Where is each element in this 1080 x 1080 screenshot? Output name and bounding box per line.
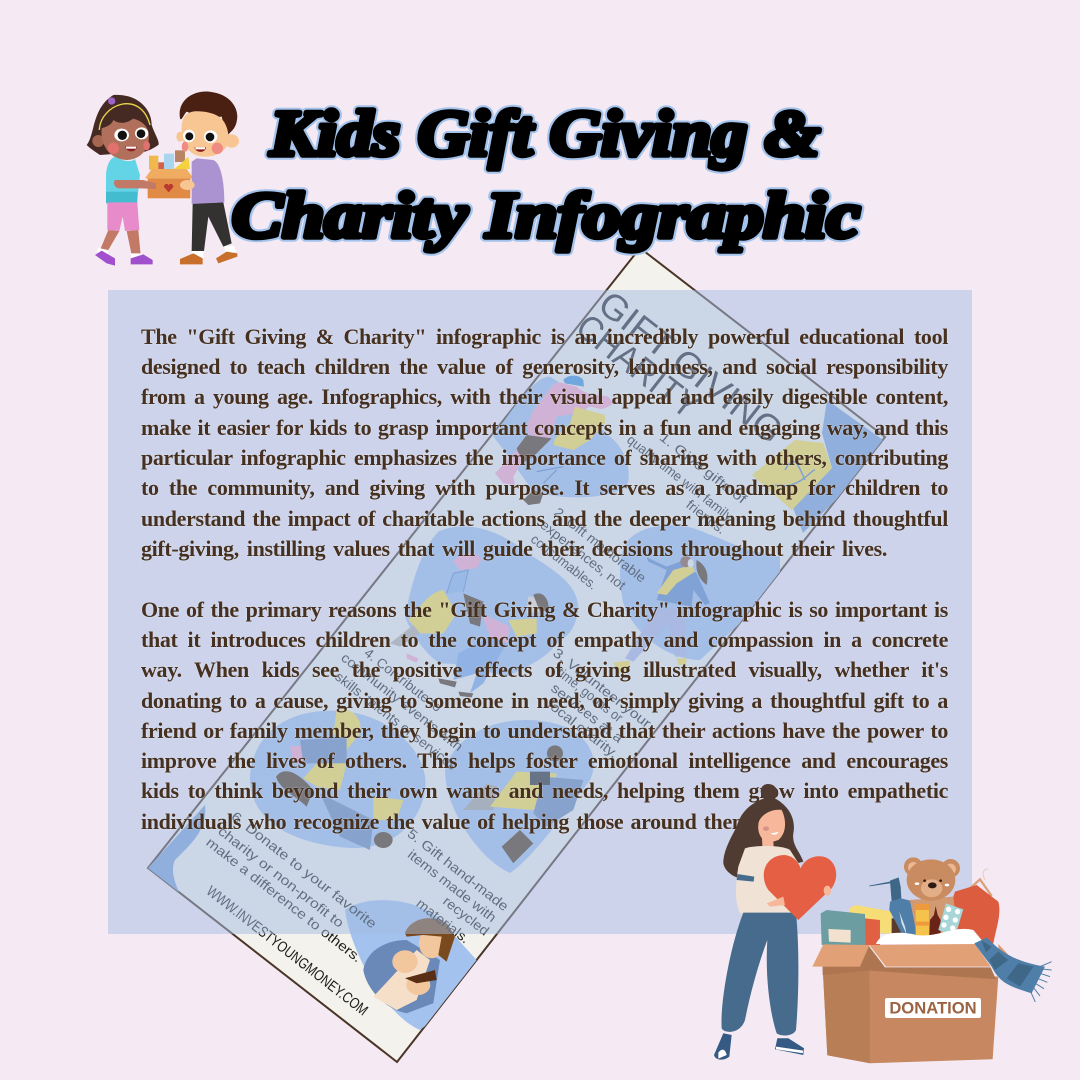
poster tip 6 — [203, 809, 380, 965]
title: Charity Infographic — [232, 180, 860, 252]
pump bottle — [869, 877, 917, 937]
text block: first paragraph — [141, 324, 948, 561]
icon: donation box with toys and supplies — [812, 857, 1052, 1063]
figure: child in yellow scarf — [613, 525, 780, 673]
figure: volunteers sitting together — [276, 709, 403, 850]
text: designed to teach children the value of generosity, kindness, and social responsibility — [141, 354, 948, 379]
poster tip 2 — [528, 505, 649, 593]
poster tip 4: community events with — [338, 650, 466, 754]
red book — [865, 918, 880, 945]
text: to the community, and giving with purpose. It serves as a roadmap for children to — [141, 475, 948, 500]
poster tip 4: 4. Contribute to — [361, 645, 445, 715]
figure: friends sharing a gift — [493, 376, 629, 505]
poster: gift giving and charity, rotated behind the panel — [146, 252, 886, 1064]
orange tube — [916, 904, 929, 937]
poster heading: charity: CHARITY — [569, 306, 707, 426]
text: make it easier for kids to grasp important concepts in a fun and engaging way, and this — [141, 415, 948, 440]
poster tip 2: consumables. — [528, 531, 600, 593]
boy — [176, 91, 239, 264]
text block: second paragraph — [141, 597, 948, 834]
small brown box — [892, 918, 903, 933]
text: particular infographic emphasizes the importance of sharing with others, contributing — [141, 445, 948, 470]
title: Kids Gift Giving & — [269, 98, 820, 170]
text: individuals who recognize the value of helping those around them. — [141, 809, 755, 834]
jacket on hanger — [950, 869, 999, 943]
white stuffing — [876, 929, 985, 944]
poster tip 3 — [545, 645, 654, 761]
blob: left corner accent — [148, 805, 205, 898]
poster tip 5: materials. — [414, 896, 472, 946]
figure: gift experiences group — [390, 526, 578, 697]
poster tip 2: 2. Gift memorable — [551, 505, 649, 585]
poster tip 5: 5. Gift hand-made — [405, 826, 511, 914]
poster tip 1: 1. Give gifts of — [657, 429, 750, 507]
text: kids to think beyond their own wants and needs, helping them grow into empathetic — [141, 778, 948, 803]
poster heading: gift giving: GIFT GIVING — [591, 283, 791, 451]
poster tip 6: charity or non-profit to — [215, 823, 347, 931]
cardboard box — [812, 944, 1012, 1063]
girl — [87, 95, 159, 266]
text: improve the lives of others. This helps foster emotional intelligence and encourages — [141, 748, 948, 773]
figure: person holding chocolates — [363, 918, 455, 1013]
title — [232, 98, 860, 252]
text: donating to a cause, giving to someone in need, or simply giving a thoughtful gift to a — [141, 688, 948, 713]
poster tip 3: 3. Volunteer your — [550, 645, 654, 731]
striped scarf — [974, 938, 1052, 1002]
icon: two kids carrying a gift box — [87, 91, 239, 266]
poster tip 5 — [405, 826, 511, 946]
poster tip 1: quality time with family — [624, 432, 736, 524]
text: understand the impact of charitable actions and the deeper meaning behind thoughtful — [141, 506, 948, 531]
text: way. When kids see the positive effects of giving illustrated visually, whether it's — [141, 657, 948, 682]
poster tip 6: 6. Donate to your favorite — [228, 809, 380, 931]
text: friend or family member, they begin to understand that their actions have the power to — [141, 718, 948, 743]
poster tip 3: time, goods or — [554, 665, 626, 726]
poster tip 2: experiences, not — [537, 517, 629, 593]
yellow book — [849, 905, 892, 933]
icon: yellow gift tag — [752, 440, 832, 510]
text: that it introduces children to the concept of empathy and compassion in a concrete — [141, 627, 948, 652]
gift box — [114, 150, 193, 198]
blob: fourth figure background — [250, 711, 426, 848]
medicine dropper — [929, 906, 941, 935]
poster footer url: WWW.INVESTYOUNGMONEY.COM — [203, 883, 371, 1019]
poster tip 3: local charity. — [545, 697, 621, 761]
figure: group with hand-made gifts — [463, 745, 583, 863]
poster tip 1: friends. — [683, 497, 729, 537]
text: One of the primary reasons the "Gift Giving & Charity" infographic is so important is — [141, 597, 948, 622]
poster tip 4: skills, talents or services — [332, 669, 460, 773]
blob: fifth figure background — [445, 720, 594, 873]
text: from a young age. Infographics, with their visual appeal and easily digestible content, — [141, 384, 948, 409]
teddy bear — [904, 857, 960, 937]
cardboard box: DONATION — [889, 999, 977, 1018]
pill blister pack — [938, 903, 963, 937]
teal book — [821, 910, 866, 945]
panel: translucent blue text background — [108, 290, 972, 934]
title: Kids Gift Giving & — [269, 98, 820, 170]
text: gift-giving, instilling values that will guide their decisions throughout their lives. — [141, 536, 887, 561]
poster tip 3: services at a — [548, 680, 626, 746]
text: The "Gift Giving & Charity" infographic is an incredibly powerful educational tool — [141, 324, 948, 349]
title: Charity Infographic — [232, 180, 860, 252]
poster tip 5: recycled — [440, 893, 492, 939]
blob: right corner accent — [793, 400, 890, 533]
blob: bottom figure background — [345, 900, 490, 1030]
poster tip 6: make a difference to others. — [203, 835, 365, 965]
poster tip 5: items made with — [405, 847, 499, 925]
icon: woman holding a heart — [714, 784, 836, 1060]
